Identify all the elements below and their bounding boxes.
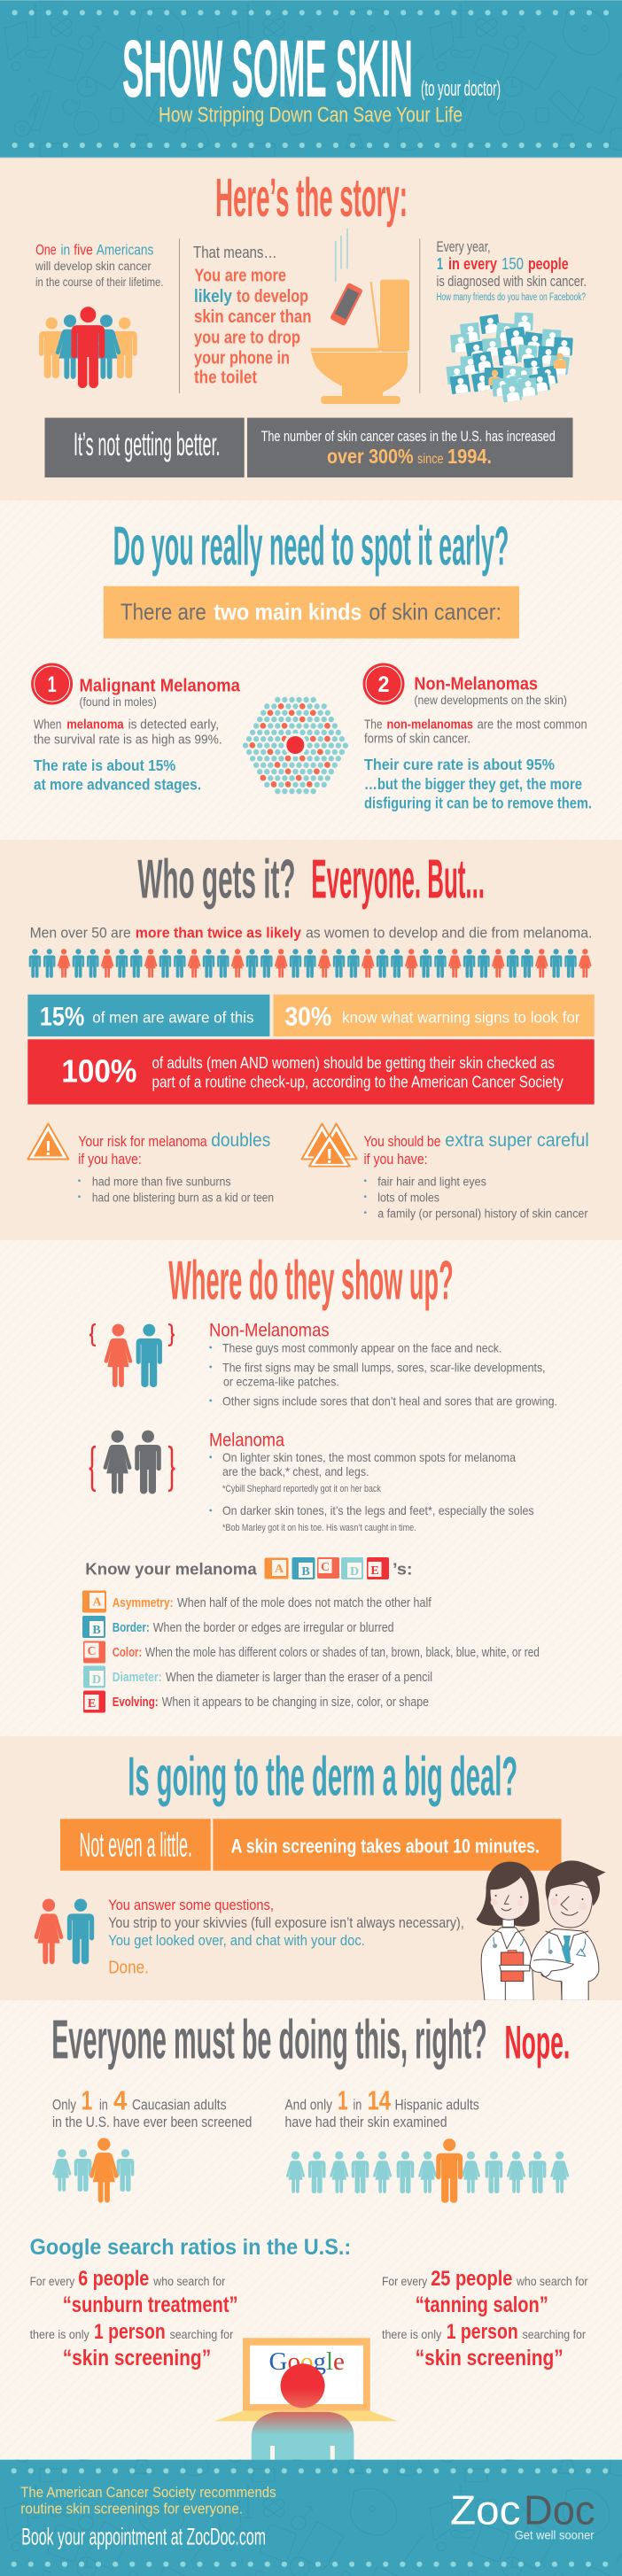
text: the process: Done. — [108, 1959, 149, 1978]
panel: spot it early — [0, 500, 622, 840]
panel: everyone must be doing this — [0, 2000, 622, 2460]
stat: 1 in 4: 4 — [113, 2085, 128, 2116]
text: men over 50: Men over 50 are — [30, 925, 131, 942]
text: the process: You get looked over, and chat with your doc. — [108, 1932, 365, 1949]
title aside: (to your doctor) — [421, 77, 501, 101]
list: asymmetry: When half of the mole does not match the other half — [177, 1596, 432, 1610]
text: sunburn ratio — [30, 2267, 238, 2370]
heading: google search ratios: Google search ratios in the U.S.: — [30, 2235, 351, 2260]
text: malignant melanoma: at more advanced stages. — [34, 776, 201, 794]
text: one in five — [35, 241, 164, 289]
icon: phone falling into toilet — [310, 229, 409, 404]
text: sunburn ratio: “skin screening” — [63, 2346, 211, 2370]
text: men over 50: as women to develop and die from melanoma. — [306, 925, 592, 942]
text: non-melanomas: forms of skin cancer. — [364, 732, 470, 747]
text: one in every 150: 150 — [501, 255, 524, 273]
subtitle: How Stripping Down Can Save Your Life — [159, 103, 463, 128]
text: the process: You answer some questions, — [108, 1897, 274, 1913]
text: sunburn ratio: For every — [30, 2274, 74, 2288]
stat: 1 in 14: Hispanic adults — [395, 2098, 479, 2114]
list: border: Border: — [113, 1621, 150, 1635]
illustration: person at laptop: Google — [269, 2347, 345, 2376]
text: sunburn ratio: who search for — [152, 2274, 226, 2288]
panel: footer — [0, 2460, 622, 2576]
stat: 30%: 30% — [285, 1002, 331, 1031]
icon row: men and women — [29, 949, 592, 978]
heading: know your ABCDEs: A — [275, 1563, 284, 1576]
text: risk doubles: if you have: — [78, 1152, 142, 1168]
callout: not getting better — [44, 418, 572, 477]
text: melanoma locations: are the back,* chest, and legs. — [222, 1464, 369, 1478]
banner: two main kinds — [104, 586, 519, 639]
text: that means: likely — [194, 287, 233, 306]
text: recommendation: The American Cancer Society recommends — [20, 2484, 276, 2501]
logo: ZocDoc: Get well sooner — [515, 2528, 595, 2542]
list: asymmetry — [82, 1591, 432, 1612]
icon row: 1 in 4 — [52, 2138, 134, 2203]
stat: 1 in 4: Caucasian adults — [132, 2098, 227, 2114]
illustration: two doctors — [477, 1860, 606, 2000]
text: non-melanomas locations: These guys most commonly appear on the face and neck. — [222, 1341, 501, 1355]
text: melanoma locations: On darker skin tones, it’s the legs and feet*, especially the soles — [222, 1503, 534, 1517]
stat: 15%: of men are aware of this — [92, 1008, 254, 1026]
stat: 1 in 4: Only — [52, 2098, 77, 2114]
stat: 100% — [27, 1039, 595, 1105]
text: tanning ratio — [382, 2267, 588, 2370]
text: melanoma locations: *Bob Marley got it on his toe. His wasn’t caught in time. — [222, 1523, 416, 1533]
text: risk doubles — [78, 1130, 274, 1204]
text: sunburn ratio: 1 person — [94, 2320, 166, 2344]
text: the process: You strip to your skivvies (full exposure isn’t always necessary), — [108, 1914, 464, 1931]
text: recommendation: routine skin screenings for everyone. — [20, 2500, 243, 2517]
list: evolving: Evolving: — [113, 1695, 159, 1710]
panel: where do they show up — [0, 1240, 622, 1736]
text: non-melanomas: …but the bigger they get, the more — [364, 775, 582, 793]
icon: couple with body braces — [89, 1431, 175, 1494]
text: malignant melanoma: Malignant Melanoma — [80, 676, 240, 696]
text: non-melanomas locations: The first signs may be small lumps, sores, scar-like developments, — [222, 1360, 546, 1374]
text: one in every 150: in every — [448, 255, 497, 273]
list: color — [83, 1641, 540, 1664]
heading: know your ABCDEs: C — [321, 1561, 330, 1574]
icon: triple warning: ! — [326, 1144, 333, 1168]
icon: warning: ! — [45, 1137, 51, 1160]
text: extra super careful: You should be — [363, 1134, 440, 1150]
text: extra super careful: if you have: — [363, 1152, 428, 1168]
stat: 1 in 14 — [285, 2085, 479, 2130]
list: diameter: When the diameter is larger than the eraser of a pencil — [166, 1671, 432, 1685]
text: extra super careful: lots of moles — [377, 1191, 439, 1204]
text: melanoma locations — [209, 1430, 534, 1533]
text: that means — [193, 244, 312, 388]
text: extra super careful: fair hair and light eyes — [377, 1175, 486, 1188]
text: non-melanomas: The — [364, 718, 383, 733]
badge: 1 — [31, 663, 73, 705]
text: malignant melanoma: is detected early, — [128, 718, 219, 733]
text: the process — [108, 1897, 464, 1978]
heading: know your ABCDEs: D — [350, 1565, 359, 1579]
text: men over 50 — [30, 925, 592, 942]
list: evolving: E — [88, 1697, 96, 1711]
text: malignant melanoma — [34, 676, 240, 794]
banner: not even a little: Not even a little. — [80, 1827, 192, 1865]
text: one in every 150 — [436, 238, 587, 303]
text: malignant melanoma: the survival rate is as high as 99%. — [34, 732, 222, 747]
text: tanning ratio: there is only — [382, 2327, 441, 2341]
badge: 1: 1 — [48, 672, 57, 697]
list: color: When the mole has different colors or shades of tan, brown, black, blue, white, or red — [145, 1646, 540, 1660]
list: diameter: Diameter: — [113, 1671, 162, 1685]
text: tanning ratio: searching for — [523, 2327, 586, 2341]
text: non-melanomas locations: or eczema-like patches. — [223, 1374, 339, 1388]
icon: triple warning — [301, 1123, 357, 1168]
text: one in five: five — [74, 241, 93, 258]
text: sunburn ratio: there is only — [30, 2327, 89, 2341]
icon: mole dot hexagon — [245, 700, 346, 791]
icon: couple — [35, 1899, 94, 1964]
stat: 1 in 4 — [52, 2085, 252, 2130]
callout: not getting better: since — [417, 452, 444, 467]
icon row: 1 in 14 — [286, 2138, 569, 2203]
text: tanning ratio: 25 people — [431, 2267, 512, 2291]
icon: couple with head braces — [89, 1324, 175, 1387]
stat: 1 in 14: 14 — [368, 2085, 392, 2116]
stat: 1 in 4: in the U.S. have ever been screened — [52, 2114, 252, 2130]
text: malignant melanoma: melanoma — [66, 718, 124, 733]
banner: two main kinds: two main kinds — [214, 598, 362, 625]
text: one in five: in — [60, 241, 70, 258]
icon: group of people — [39, 306, 137, 388]
text: men over 50: more than twice as likely — [136, 925, 302, 942]
stat: 1 in 4: in — [99, 2098, 108, 2114]
stat: 15%: 15% — [40, 1002, 84, 1031]
text: tanning ratio: “tanning salon” — [416, 2293, 548, 2317]
stat: 30%: know what warning signs to look for — [342, 1008, 580, 1026]
callout: not getting better: over 300% — [327, 445, 413, 468]
text: extra super careful: a family (or personal) history of skin cancer — [377, 1207, 588, 1220]
list: diameter — [83, 1665, 432, 1688]
stat: 1 in 14: have had their skin examined — [285, 2114, 447, 2130]
panel: is going to the derm a big deal — [0, 1736, 622, 2000]
list: asymmetry: Asymmetry: — [113, 1596, 174, 1610]
text: one in every 150: people — [528, 255, 569, 273]
text: one in five: will develop skin cancer — [35, 260, 152, 273]
text: non-melanomas: (new developments on the skin) — [414, 694, 567, 707]
text: non-melanomas: Their cure rate is about 95% — [364, 756, 555, 773]
text: recommendation — [20, 2484, 276, 2549]
text: risk doubles: doubles — [211, 1130, 270, 1151]
text: sunburn ratio: “sunburn treatment” — [63, 2293, 238, 2317]
text: risk doubles: Your risk for melanoma — [78, 1134, 207, 1150]
stat: 100%: 100% — [61, 1053, 136, 1090]
heading: Who gets it? — [137, 849, 296, 910]
badge: 2: 2 — [377, 672, 390, 697]
text: tanning ratio: who search for — [516, 2274, 588, 2288]
list: evolving — [83, 1690, 429, 1713]
text: malignant melanoma: (found in moles) — [80, 695, 157, 709]
list: diameter: D — [92, 1673, 101, 1687]
text: one in five: Americans — [97, 241, 153, 258]
text: non-melanomas locations: Other signs include sores that don’t heal and sores that are growing. — [222, 1393, 557, 1408]
logo: ZocDoc: Doc — [524, 2487, 595, 2533]
stat: 30% — [273, 995, 595, 1036]
callout: not getting better: 1994. — [447, 445, 492, 468]
icon: warning — [27, 1123, 68, 1160]
list: color: Color: — [113, 1646, 142, 1660]
text: malignant melanoma: The rate is about 15% — [34, 757, 176, 774]
banner: not even a little — [60, 1819, 562, 1871]
text: non-melanomas locations — [209, 1321, 557, 1408]
text: that means: to develop — [237, 287, 308, 306]
text: melanoma locations: On lighter skin tones, the most common spots for melanoma — [222, 1450, 516, 1464]
text: one in every 150: 1 — [437, 255, 443, 273]
panel: who gets it — [0, 840, 622, 1240]
icon: cluster of friends — [447, 313, 573, 402]
heading: know your ABCDEs: ’s: — [393, 1561, 413, 1579]
text: non-melanomas: non-melanomas — [386, 718, 473, 733]
text: that means: You are more — [194, 267, 286, 286]
text: sunburn ratio: 6 people — [78, 2267, 149, 2291]
text: risk doubles: had one blistering burn as a kid or teen — [92, 1191, 274, 1204]
text: extra super careful — [363, 1130, 589, 1220]
text: one in five: One — [35, 241, 57, 258]
text: one in every 150: Every year, — [436, 238, 491, 255]
panel: here's the story — [0, 158, 622, 500]
banner: two main kinds: of skin cancer: — [369, 598, 501, 625]
text: tanning ratio: “skin screening” — [416, 2346, 564, 2370]
banner: two main kinds: There are — [121, 598, 206, 625]
list: evolving: When it appears to be changing in size, color, or shape — [162, 1695, 429, 1710]
callout: not getting better: It’s not getting better. — [74, 426, 220, 462]
stat: 1 in 14: in — [353, 2098, 362, 2114]
text: melanoma locations: Melanoma — [209, 1430, 284, 1450]
text: sunburn ratio: searching for — [170, 2327, 233, 2341]
text: non-melanomas locations: Non-Melanomas — [209, 1321, 330, 1341]
stat: 1 in 14: 1 — [338, 2085, 348, 2116]
text: tanning ratio: For every — [382, 2274, 427, 2288]
text: extra super careful: extra super careful — [445, 1130, 589, 1151]
logo: ZocDoc: Zoc — [450, 2487, 520, 2533]
text: malignant melanoma: When — [34, 718, 61, 733]
heading: know your ABCDEs: B — [301, 1565, 310, 1579]
text: that means: the toilet — [194, 369, 257, 388]
list: border: B — [92, 1624, 101, 1637]
text: tanning ratio: 1 person — [447, 2320, 518, 2344]
text: recommendation: Book your appointment at ZocDoc.com — [21, 2523, 266, 2549]
list: color: C — [87, 1645, 97, 1658]
list: border: When the border or edges are irregular or blurred — [153, 1621, 394, 1635]
illustration: person at laptop — [214, 2338, 398, 2460]
heading: know your ABCDEs — [85, 1557, 413, 1579]
list: asymmetry: A — [92, 1596, 102, 1609]
text: risk doubles: had more than five sunburns — [92, 1175, 231, 1188]
text: non-melanomas: are the most common — [478, 718, 587, 733]
text: non-melanomas — [364, 674, 592, 812]
heading: know your ABCDEs: Know your melanoma — [85, 1561, 258, 1579]
banner: not even a little: A skin screening takes about 10 minutes. — [231, 1835, 540, 1858]
text: non-melanomas: Non-Melanomas — [414, 674, 538, 694]
badge: 2 — [363, 663, 404, 705]
list: border — [82, 1616, 394, 1638]
text: that means: you are to drop — [194, 328, 300, 347]
text: one in five: in the course of their lifetime. — [35, 275, 163, 289]
panel: header — [0, 0, 622, 159]
stat: 1 in 4: 1 — [82, 2085, 92, 2116]
stat: 15% — [27, 995, 269, 1036]
stat: 1 in 14: And only — [285, 2098, 333, 2114]
logo: ZocDoc — [450, 2487, 595, 2542]
text: melanoma locations: *Cybill Shephard reportedly got it on her back — [222, 1484, 381, 1494]
text: that means: skin cancer than — [194, 307, 312, 327]
text: that means: your phone in — [194, 349, 290, 369]
heading: know your ABCDEs: E — [370, 1564, 379, 1578]
text: that means: That means… — [193, 244, 276, 261]
